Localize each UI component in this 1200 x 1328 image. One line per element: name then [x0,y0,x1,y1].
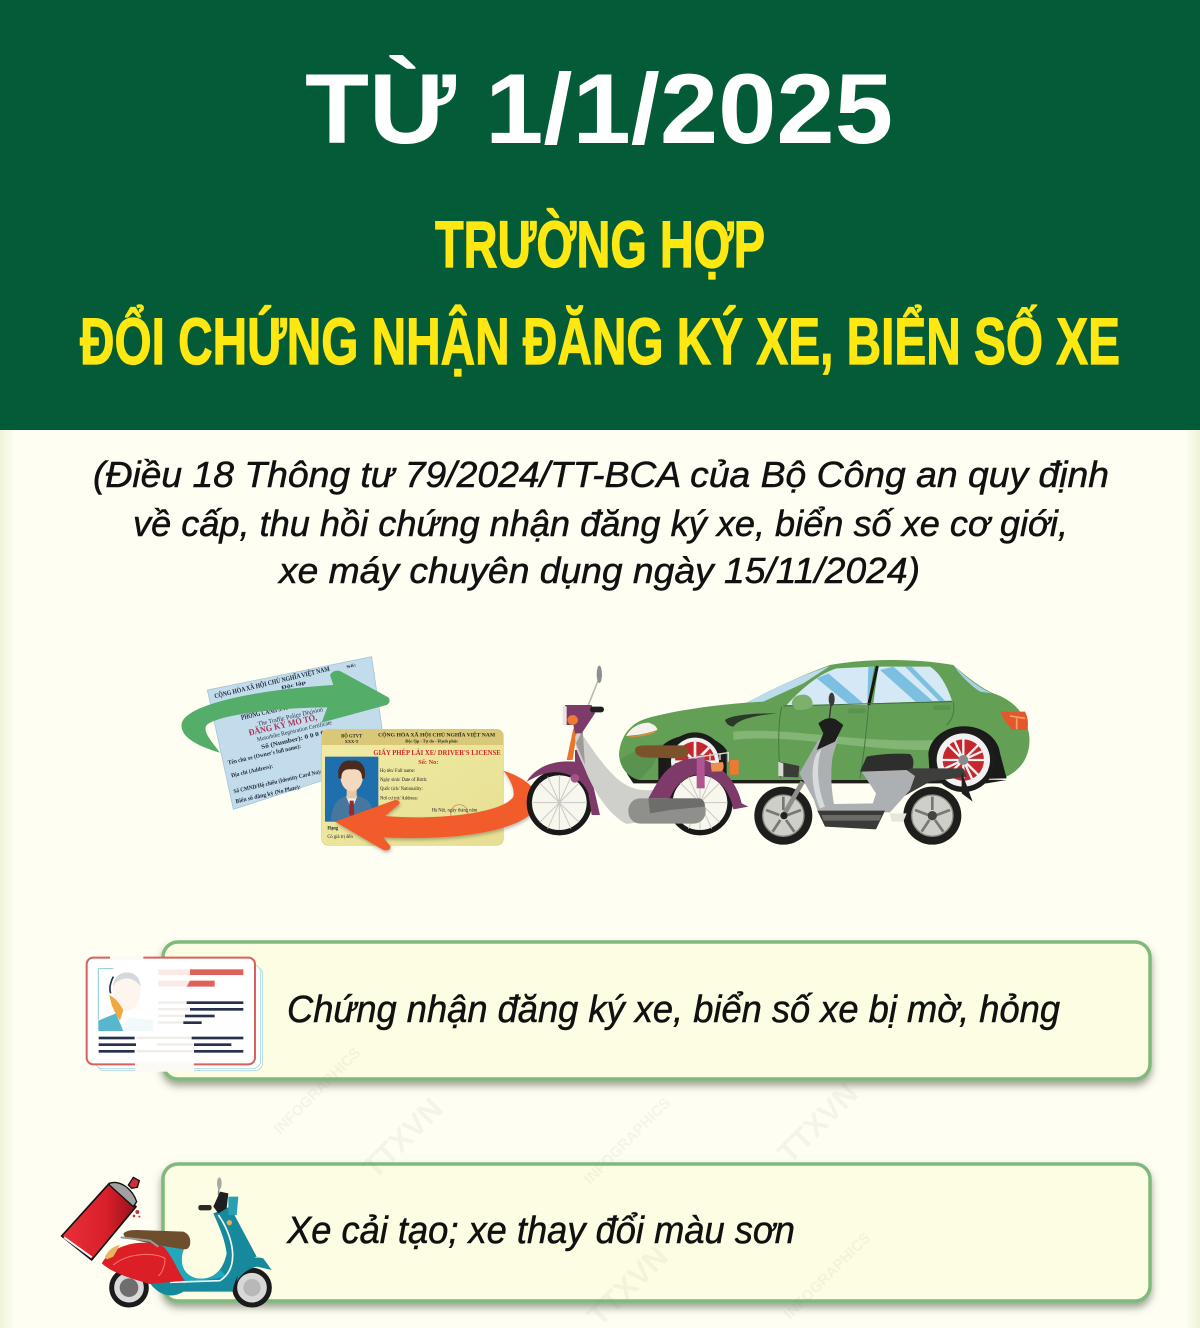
illustration: documents with exchange arrows [182,657,537,850]
faint watermarks: INFOGRAPHICS [581,1094,674,1188]
legal citation text block: về cấp, thu hồi chứng nhận đăng ký xe, biển số xe cơ giới, [133,503,1068,544]
red rear fairing [102,1243,185,1284]
driver's license card [322,729,503,845]
page background [0,430,1200,1328]
green car [619,660,1029,792]
registration certificate [207,657,387,809]
registration certificate: Số (Number): 0 0 0 0 0 [261,728,330,751]
seat [860,754,913,772]
stamp [451,805,468,822]
portrait [325,757,378,822]
orange arrow [335,771,537,850]
moped [527,666,748,833]
rear fairing and tail [893,768,967,797]
front fender and fork [527,750,600,815]
faint watermarks: TTXVN [772,1077,864,1170]
header band [0,0,1200,430]
driver's license card: Có giá trị đến [327,835,353,840]
floorboard [817,811,885,829]
legal citation text block: (Điều 18 Thông tư 79/2024/TT-BCA của Bộ Công an quy định [93,454,1109,495]
faint watermarks: INFOGRAPHICS [271,1044,364,1138]
front wheel [529,773,589,833]
driver's license card: XXX-T [345,739,359,744]
legal citation text block: xe máy chuyên dụng ngày 15/11/2024) [277,550,920,591]
faint watermarks [271,1044,874,1328]
illustration: car, moped and scooter [527,660,1029,845]
registration certificate: Số: [346,662,358,669]
windows [747,666,830,703]
portrait [98,969,153,1031]
driver's license card: Nơi cư trú/ Address: [380,796,418,801]
driver's license card: Quốc tịch/ Nationality: [380,787,423,792]
rear wheel [903,787,961,845]
card 2 text: Xe cải tạo; xe thay đổi màu sơn [286,1210,795,1252]
card 1 icon: ID card [87,956,263,1072]
driver's license card: Họ tên/ Full name: [380,769,415,774]
wheels [112,1270,146,1305]
faint watermarks: TTXVN [357,1092,449,1185]
door seams and handles [779,702,954,778]
registration certificate: ĐĂNG KÝ MÔ TÔ, [248,712,318,738]
driver's license card: Hạng [327,826,339,831]
tail light [1001,712,1028,730]
registration certificate: PHÒNG CẢNH SÁT [240,701,289,722]
registration certificate: CỘNG HÒA XÃ HỘI CHỦ NGHĨA VIỆT NAM [214,665,331,700]
side mirror [792,695,813,710]
orange fork [567,728,577,760]
rear frame and fender [648,758,748,809]
legal citation text block [93,454,1109,591]
mirror and stem [588,680,598,705]
front wheel [754,787,812,845]
subtitle: line one: TRƯỜNG HỢP [435,207,765,281]
registration certificate: Biển số đăng ký (No Plate): [235,783,301,805]
registration certificate: Số CMND/Hộ chiếu (Identity Card No): [233,768,322,795]
seat [635,745,688,758]
driver's license card: BỘ GTVT [341,733,363,739]
handlebar and mirror [817,718,843,750]
green arrow [182,671,390,753]
card 1 text: Chứng nhận đăng ký xe, biển số xe bị mờ, hỏng [287,989,1060,1031]
muffler [628,798,706,824]
driver's license card: Số: No: [418,759,438,766]
driver's license card: GIẤY PHÉP LÁI XE/ DRIVER'S LICENSE [373,749,501,757]
handlebar head [565,705,595,733]
card 2 icon: spray can and scooter [62,1177,272,1305]
wheels [658,732,727,791]
teal body [150,1207,257,1295]
handlebar, mirror, headlight [218,1183,219,1195]
driver's license card: Ngày sinh/ Date of Birth: [380,778,427,783]
silver leg shield [575,730,653,824]
electric scooter [754,693,973,845]
registration certificate: Motorbike Registration Certificate [256,719,333,743]
registration certificate: Tên chủ xe (Owner's full name): [227,743,302,767]
registration certificate: Địa chỉ (Address): [231,763,274,779]
headlight [778,762,799,777]
headlight [626,723,657,736]
seat [123,1230,190,1249]
card 1 [163,942,1150,1079]
driver's license card: Hà Nội, ngày tháng năm [432,808,478,813]
driver's license card: Độc lập - Tự do - Hạnh phúc [405,739,458,744]
data lines [158,969,190,975]
spray can [62,1177,140,1260]
rear wheel [670,773,730,833]
driver's license card: CỘNG HÒA XÃ HỘI CHỦ NGHĨA VIỆT NAM [378,731,496,739]
card 2 [163,1164,1150,1301]
registration certificate: Độc lập [281,681,307,691]
air vent [725,713,777,727]
title: TỪ 1/1/2025 [305,53,893,164]
body panels [862,770,915,812]
registration certificate: The Traffic Police Division [257,706,325,728]
faint watermarks: INFOGRAPHICS [781,1229,874,1323]
